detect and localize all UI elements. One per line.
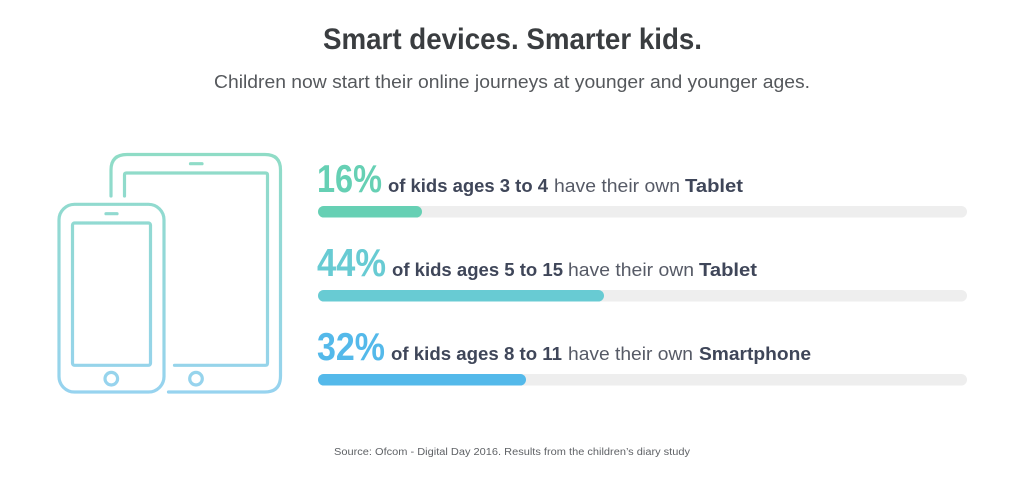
subtitle: Children now start their online journeys at younger and younger ages. — [214, 72, 810, 92]
label: of kids ages 8 to 11 — [391, 344, 562, 364]
label: Smartphone — [699, 344, 811, 364]
percentage 44%: 44% — [317, 242, 386, 285]
label: of kids ages 5 to 15 — [392, 260, 563, 280]
icon: phone — [59, 204, 164, 392]
label: Tablet — [699, 260, 757, 280]
row: kids ages 8 to 11 — [317, 326, 967, 386]
icon: tablet — [111, 154, 280, 392]
icon: phone and tablet outlines — [59, 154, 280, 392]
label: have their own — [568, 344, 693, 364]
title: Smart devices. Smarter kids. — [323, 23, 702, 56]
bar track and fill — [318, 374, 967, 386]
source note: Source: Ofcom - Digital Day 2016. Results from the children’s diary study — [334, 447, 690, 458]
label: of kids ages 3 to 4 — [388, 176, 548, 196]
row: kids ages 3 to 4 — [317, 158, 967, 218]
row: kids ages 5 to 15 — [317, 242, 967, 302]
label: Tablet — [685, 176, 743, 196]
bar track and fill — [318, 290, 967, 302]
percentage 32%: 32% — [317, 326, 385, 369]
label: have their own — [568, 260, 694, 280]
bar track and fill — [318, 206, 967, 218]
label: have their own — [554, 176, 680, 196]
percentage 16%: 16% — [317, 158, 382, 201]
